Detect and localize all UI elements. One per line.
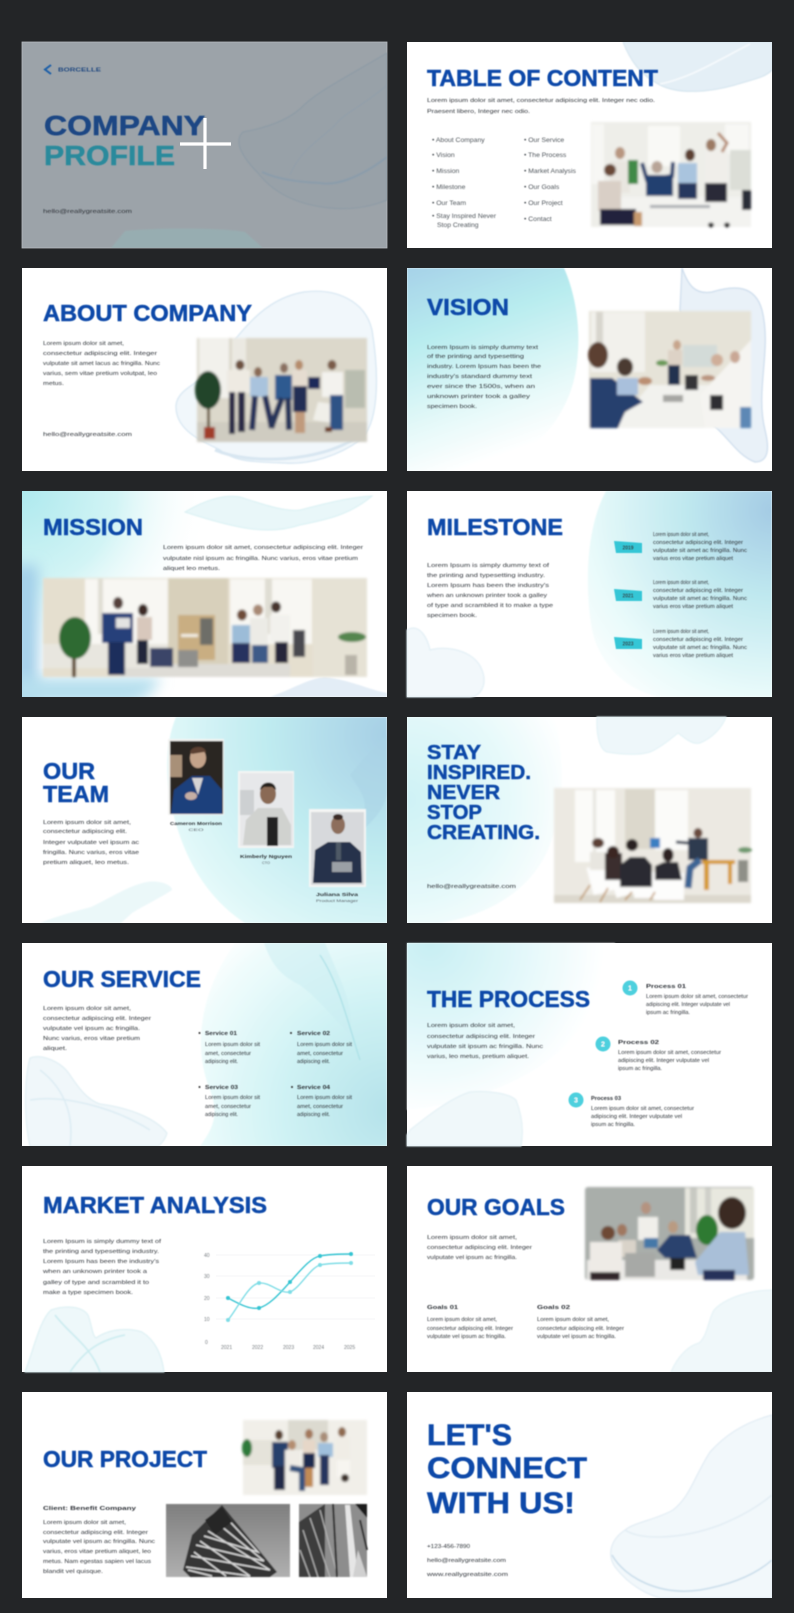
slide background	[407, 943, 772, 1146]
description text: the printing and typesetting industry.	[43, 1249, 159, 1255]
milestone 3: varius eros vitae pretium aliquet	[653, 653, 734, 659]
process step 1: adipiscing elit. Integer vulputate vel	[646, 1002, 730, 1008]
contents list column 2: • Contact	[524, 216, 552, 223]
service 01: Lorem ipsum dolor sit	[205, 1042, 261, 1048]
wave decoration	[671, 1290, 772, 1372]
panel: milestone slide	[407, 491, 772, 697]
description text: Nunc varius, eros vitae pretium	[43, 1036, 141, 1042]
description text: consectetur adipiscing elit. Integer	[427, 1245, 532, 1251]
panel: our project slide	[22, 1392, 387, 1598]
team photo 2	[238, 771, 294, 848]
contents list column 2: • Our Goals	[524, 184, 560, 191]
contact details: +123-456-7890	[427, 1544, 470, 1550]
intro text: Praesent libero, Integer nec odio.	[427, 109, 530, 115]
description text: when an unknown printer took a galley	[426, 593, 547, 599]
slide background	[407, 717, 772, 923]
chart axis labels: 2024	[313, 1345, 324, 1351]
process step 3: Lorem ipsum dolor sit amet, consectetur	[591, 1106, 694, 1112]
heading	[43, 758, 109, 807]
description text: of the printing and typesetting	[427, 354, 524, 360]
description text: industry. Lorem Ipsum has been the	[427, 364, 541, 370]
description text	[427, 1235, 532, 1261]
goal 02: Lorem ipsum dolor sit amet,	[537, 1317, 610, 1323]
cover title: COMPANY	[44, 110, 205, 141]
heading: VISION	[427, 294, 509, 320]
chart axis labels: 2022	[252, 1345, 263, 1351]
slide background	[22, 717, 387, 923]
gradient blob	[167, 717, 387, 923]
process step 3	[568, 1092, 694, 1128]
service 02: Lorem ipsum dolor sit	[297, 1042, 353, 1048]
heading: OUR SERVICE	[43, 966, 201, 992]
service 04: amet, consectetur	[297, 1104, 343, 1110]
goal 02: consectetur adipiscing elit. Integer	[537, 1326, 624, 1332]
email: hello@reallygreatsite.com	[427, 884, 517, 890]
description text: Lorem Ipsum has been the industry's	[427, 583, 549, 589]
contents list column 1: • Our Team	[432, 200, 466, 207]
contents list column 1: • About Company	[432, 137, 485, 144]
process step 3: Process 03	[591, 1096, 621, 1102]
gradient blob	[407, 717, 562, 923]
chart axis labels: 2021	[221, 1345, 232, 1351]
chart axis labels: 0	[205, 1340, 208, 1346]
milestone 3	[614, 629, 747, 659]
team member 1 name: CEO	[188, 827, 204, 832]
team member 3 name: Juliana Silva	[316, 892, 359, 897]
team member 1 name: Cameron Morrison	[170, 821, 222, 826]
description text	[43, 1006, 151, 1052]
logo: BORCELLE	[58, 68, 101, 74]
goal 01: Goals 01	[427, 1305, 458, 1311]
chart axis labels: 20	[204, 1296, 210, 1302]
milestone 1: 2019	[622, 546, 634, 552]
description text: aliquet.	[43, 1046, 67, 1052]
process step 3: 3	[574, 1098, 578, 1104]
chart axis labels: 30	[204, 1274, 210, 1280]
slide background	[22, 943, 387, 1146]
contents list column 1: • Mission	[432, 168, 460, 175]
heading: LET'S	[427, 1419, 512, 1452]
process step 1: Process 01	[646, 984, 686, 990]
wave decoration	[597, 717, 726, 754]
panel: market analysis slide	[22, 1166, 387, 1372]
team photo 1	[168, 739, 224, 815]
chart series 1	[226, 1252, 353, 1310]
goal 02: vulputate vel ipsum ac fringilla.	[537, 1334, 616, 1340]
cover title: PROFILE	[44, 140, 175, 171]
heading: MISSION	[43, 514, 143, 540]
service 04: Service 04	[297, 1085, 330, 1091]
description text: vulputate sit amet lacus ac fringilla. Nunc	[43, 361, 160, 367]
wave decoration	[407, 1091, 522, 1146]
heading: INSPIRED.	[427, 762, 531, 784]
milestone 1: consectetur adipiscing elit. Integer	[653, 540, 743, 546]
service 03: Lorem ipsum dolor sit	[205, 1095, 261, 1101]
contents list column 1	[432, 137, 497, 229]
description text	[43, 1520, 155, 1575]
slide background	[407, 1166, 772, 1372]
slide background	[407, 491, 772, 697]
description text: unknown printer took a galley	[427, 394, 530, 400]
team member 2 name: Kimberly Nguyen	[240, 854, 292, 859]
description text	[427, 345, 541, 410]
service 01	[198, 1031, 261, 1065]
photo: building 2	[299, 1504, 367, 1577]
client subheading: Client: Benefit Company	[43, 1506, 136, 1512]
cover title	[44, 110, 205, 171]
process step 3: ipsum ac fringilla.	[591, 1122, 635, 1128]
gradient blob	[407, 943, 615, 1110]
team member 2 name	[240, 854, 292, 865]
team member 1 name	[170, 821, 222, 832]
panel: stay inspired slide	[407, 717, 772, 923]
description text: specimen book.	[427, 613, 477, 619]
wave decorations	[40, 735, 387, 923]
service 02: adipiscing elit.	[297, 1059, 330, 1065]
milestone 3: Lorem ipsum dolor sit amet,	[653, 629, 709, 635]
wave decoration	[611, 1415, 772, 1598]
cover background	[22, 42, 387, 248]
description text: consectetur adipiscing elit. Integer	[43, 1530, 148, 1536]
description text: aliquet leo metus.	[163, 566, 220, 572]
team member 3 name	[316, 892, 359, 903]
contents list column 1: • Stay Inspired Never	[432, 213, 497, 220]
heading: TABLE OF CONTENT	[427, 65, 658, 91]
description text: consectetur adipiscing elit.	[43, 829, 127, 835]
intro text: Lorem ipsum dolor sit amet, consectetur adipiscing elit. Integer nec odio.	[427, 98, 655, 104]
heading: CONNECT	[427, 1452, 587, 1485]
description text: blandit vel quisque.	[43, 1569, 103, 1575]
heading: OUR PROJECT	[43, 1446, 207, 1472]
wave decoration	[185, 496, 387, 697]
service 04: adipiscing elit.	[297, 1112, 330, 1118]
description text: fringilla. Nunc varius, eros vitae	[43, 850, 139, 856]
photo: team group	[242, 1420, 367, 1495]
panel: company profile cover slide	[22, 42, 387, 248]
slide background	[22, 1166, 387, 1372]
goal 02: Goals 02	[537, 1305, 570, 1311]
panel: table of content slide	[407, 42, 772, 248]
process step 1: Lorem ipsum dolor sit amet, consectetur	[646, 994, 748, 1000]
description text	[42, 1239, 162, 1296]
process step 2: Lorem ipsum dolor sit amet, consectetur	[618, 1050, 721, 1056]
contents list column 2: • Our Project	[524, 200, 563, 207]
contents list column 1: • Vision	[432, 152, 455, 159]
description text: varius, leo metus, pretium aliquet.	[427, 1054, 529, 1060]
photo: team standing	[195, 338, 367, 442]
cover email: hello@reallygreatsite.com	[43, 209, 133, 215]
photo: building 1	[166, 1504, 290, 1577]
panel: about company slide	[22, 268, 387, 471]
logo	[45, 65, 101, 74]
chart axis labels: 10	[204, 1317, 210, 1323]
description text: industry's standard dummy text	[427, 374, 533, 380]
wave decoration	[623, 42, 772, 91]
milestone 2	[614, 580, 747, 610]
milestone 3: consectetur adipiscing elit. Integer	[653, 637, 743, 643]
description text: vulputate vel ipsum ac fringilla.	[427, 1255, 517, 1261]
process step 1	[622, 980, 748, 1016]
wave decoration	[25, 1307, 164, 1372]
description text	[427, 1023, 543, 1060]
heading: OUR GOALS	[427, 1194, 565, 1220]
description text: of type and scrambled it to make a type	[427, 603, 553, 609]
process step 2	[596, 1036, 721, 1072]
description text: Lorem Ipsum has been the industry's	[43, 1259, 159, 1265]
heading: OUR	[43, 758, 95, 784]
goal 01: Lorem ipsum dolor sit amet,	[427, 1317, 498, 1323]
gradient blob	[588, 491, 772, 697]
heading	[427, 742, 540, 844]
cover wave decoration	[111, 53, 387, 248]
heading: MILESTONE	[427, 514, 563, 540]
description text: make a type specimen book.	[43, 1290, 133, 1296]
slide background	[22, 268, 387, 471]
description text: when an unknown printer took a	[42, 1269, 147, 1275]
slide background	[407, 42, 772, 248]
description text: vulputate nisl ipsum ac fringilla. Nunc varius, eros vitae pretium	[163, 556, 359, 562]
process step 1: 1	[628, 986, 632, 992]
heading: NEVER	[427, 782, 501, 804]
service 01: amet, consectetur	[205, 1051, 251, 1057]
service 02	[290, 1031, 353, 1065]
description text: Lorem ipsum dolor sit amet,	[43, 341, 125, 347]
milestone 2: vulputate sit amet ac fringilla. Nunc	[653, 596, 747, 602]
process step 3: adipiscing elit. Integer vulputate vel	[591, 1114, 682, 1120]
chart axis labels	[204, 1253, 355, 1351]
description text: Lorem ipsum dolor sit amet,	[43, 1520, 127, 1526]
slide background	[22, 1392, 387, 1598]
photo: team meeting	[585, 1187, 754, 1280]
wave decoration	[407, 628, 484, 697]
gradient blob	[22, 491, 172, 697]
photo: team celebrating	[591, 122, 751, 228]
description text	[43, 341, 160, 387]
panel: our team slide	[22, 717, 387, 923]
photo: presenter with audience	[554, 788, 752, 903]
gradient blob	[200, 943, 387, 1146]
slide background	[22, 491, 387, 697]
service 03	[198, 1085, 261, 1118]
heading: ABOUT COMPANY	[43, 300, 252, 326]
description text: ever since the 1500s, when an	[427, 384, 535, 390]
plus icon	[180, 118, 231, 169]
heading: THE PROCESS	[427, 986, 590, 1012]
chart axis labels: 40	[204, 1253, 210, 1259]
intro text	[427, 98, 655, 115]
description text: Lorem ipsum dolor sit amet,	[427, 1023, 516, 1029]
milestone 2: consectetur adipiscing elit. Integer	[653, 588, 743, 594]
heading: WITH US!	[427, 1487, 575, 1520]
heading: CREATING.	[427, 822, 540, 844]
service 04: Lorem ipsum dolor sit	[297, 1095, 353, 1101]
goal 01: vulputate vel ipsum ac fringilla.	[427, 1334, 506, 1340]
description text: metus.	[43, 381, 64, 387]
description text: varius, eros vitae pretium aliquet, leo	[43, 1549, 151, 1555]
process step 1: ipsum ac fringilla.	[646, 1010, 690, 1016]
photo: applauding meeting	[588, 311, 751, 428]
description text: vulputate vel ipsum ac fringilla. Nunc	[43, 1539, 155, 1545]
panel: the process slide	[407, 943, 772, 1146]
slide background	[407, 1392, 772, 1598]
description text: Lorem ipsum dolor sit amet, consectetur adipiscing elit. Integer	[163, 545, 363, 551]
description text: consectetur adipiscing elit. Integer	[427, 1034, 535, 1040]
team photo 3	[309, 809, 366, 887]
chart series 2	[226, 1261, 353, 1322]
contact details: hello@reallygreatsite.com	[427, 1558, 507, 1564]
process step 2: ipsum ac fringilla.	[618, 1066, 662, 1072]
panel: our service slide	[22, 943, 387, 1146]
milestone 1: Lorem ipsum dolor sit amet,	[653, 532, 709, 538]
heading	[427, 1419, 587, 1520]
description text: Integer vulputate vel ipsum ac	[43, 840, 139, 846]
wave decorations	[26, 943, 360, 1146]
contact details: www.reallygreatsite.com	[426, 1572, 509, 1578]
process step 2: Process 02	[618, 1040, 659, 1046]
milestone 1: vulputate sit amet ac fringilla. Nunc	[653, 548, 747, 554]
description text: Lorem Ipsum is simply dummy text	[427, 345, 539, 351]
description text: Lorem ipsum dolor sit amet,	[43, 820, 132, 826]
milestone 2: Lorem ipsum dolor sit amet,	[653, 580, 709, 586]
goal 01: consectetur adipiscing elit. Integer	[427, 1326, 513, 1332]
wave decoration	[680, 268, 768, 462]
description text	[163, 545, 363, 572]
contents list column 2: • Our Service	[524, 137, 564, 144]
process step 2: 2	[601, 1042, 605, 1048]
team member 2 name: CTO	[262, 860, 270, 865]
service 02: Service 02	[297, 1031, 330, 1037]
description text: varius, sem vitae pretium volutpat, leo	[43, 371, 157, 377]
contents list column 2	[524, 137, 576, 223]
heading: STOP	[427, 802, 482, 824]
heading: STAY	[427, 742, 482, 764]
panel: vision slide	[407, 268, 772, 471]
photo: office discussion	[43, 578, 367, 677]
milestone 3: 2023	[622, 642, 634, 648]
service 03: adipiscing elit.	[205, 1112, 238, 1118]
milestone 2: varius eros vitae pretium aliquet	[653, 604, 734, 610]
description text: Lorem ipsum dolor sit amet,	[43, 1006, 132, 1012]
description text: Lorem Ipsum is simply dummy text of	[427, 563, 550, 569]
wave blob decoration	[176, 291, 376, 463]
description text: vulputate sit ipsum ac fringilla. Nunc	[427, 1044, 543, 1050]
chart axis labels: 2023	[283, 1345, 294, 1351]
description text	[43, 820, 139, 866]
service 01: adipiscing elit.	[205, 1059, 238, 1065]
panel: our goals slide	[407, 1166, 772, 1372]
chart axis labels: 2025	[344, 1345, 355, 1351]
email: hello@reallygreatsite.com	[43, 432, 133, 438]
panel: let's connect slide	[407, 1392, 772, 1598]
team member 3 name: Product Manager	[316, 898, 359, 903]
description text: the printing and typesetting industry.	[427, 573, 545, 579]
milestone 1: varius eros vitae pretium aliquet	[653, 556, 734, 562]
description text: metus. Nam egestas sapien vel lacus	[43, 1559, 151, 1565]
service 02: amet, consectetur	[297, 1051, 343, 1057]
description text: consectetur adipiscing elit. Integer	[43, 351, 157, 357]
heading: TEAM	[43, 781, 109, 807]
service 03: amet, consectetur	[205, 1104, 251, 1110]
description text: consectetur adipiscing elit. Integer	[43, 1016, 151, 1022]
contact details	[426, 1544, 509, 1578]
description text	[426, 563, 553, 619]
milestone 1	[614, 532, 747, 562]
contents list column 1: • Milestone	[432, 184, 466, 191]
goal 01	[427, 1305, 513, 1340]
slide background	[407, 268, 772, 471]
description text: pretium aliquet, leo metus.	[43, 860, 129, 866]
contents list column 2: • The Process	[524, 152, 567, 159]
milestone 2: 2021	[622, 594, 634, 600]
milestone 3: vulputate sit amet ac fringilla. Nunc	[653, 645, 747, 651]
description text: Lorem ipsum dolor sit amet,	[427, 1235, 518, 1241]
panel: mission slide	[14, 491, 387, 710]
line chart	[204, 1252, 375, 1351]
gradient blob	[407, 268, 578, 471]
goal 02	[537, 1305, 624, 1340]
contents list column 2: • Market Analysis	[524, 168, 576, 175]
service 01: Service 01	[205, 1031, 237, 1037]
description text: Lorem Ipsum is simply dummy text of	[43, 1239, 162, 1245]
description text: specimen book.	[427, 404, 477, 410]
service 03: Service 03	[205, 1085, 238, 1091]
description text: vulputate vel ipsum ac fringilla.	[43, 1026, 140, 1032]
description text: galley of type and scrambled it to	[43, 1280, 149, 1286]
contents list column 1: Stop Creating	[437, 222, 479, 229]
process step 2: adipiscing elit. Integer vulputate vel	[618, 1058, 709, 1064]
service 04	[291, 1085, 353, 1118]
heading: MARKET ANALYSIS	[43, 1192, 267, 1218]
